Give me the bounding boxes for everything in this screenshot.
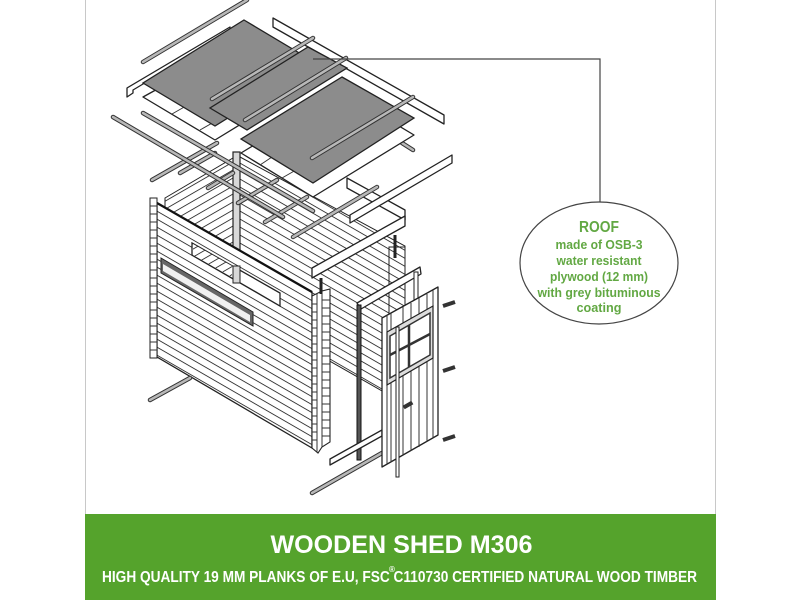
footer banner xyxy=(85,514,716,600)
shed exploded diagram xyxy=(113,0,455,493)
back left wall xyxy=(165,158,233,290)
corner post xyxy=(233,152,240,282)
wall top edge xyxy=(157,203,312,292)
wall window xyxy=(161,258,253,326)
roof panel 3 xyxy=(241,77,414,183)
roof battens xyxy=(143,0,413,158)
page frame xyxy=(86,0,716,514)
door frame xyxy=(357,267,421,460)
registered mark: ® xyxy=(389,565,395,574)
callout: roof: ROOF xyxy=(579,219,619,236)
long rafters xyxy=(113,113,313,217)
front wall xyxy=(157,203,312,448)
callout: roof: with grey bituminous xyxy=(537,285,660,300)
callout: roof: coating xyxy=(576,300,622,315)
ceiling beams xyxy=(152,143,413,222)
door handle xyxy=(403,401,413,409)
door rod xyxy=(396,327,399,477)
bolts xyxy=(443,302,455,440)
left fascia board xyxy=(127,27,230,97)
right log ends xyxy=(312,278,330,453)
roof panel 2 xyxy=(210,47,347,130)
floor boards xyxy=(150,378,382,493)
callout: roof xyxy=(520,202,678,324)
wall opening xyxy=(192,243,280,306)
callout leader line xyxy=(313,59,600,203)
callout: roof: made of OSB-3 xyxy=(556,237,642,252)
left log ends xyxy=(150,198,157,358)
back right wall xyxy=(240,157,405,404)
right wall end post xyxy=(389,235,405,317)
front fascia boards xyxy=(293,155,452,278)
callout: roof: plywood (12 mm) xyxy=(550,269,648,284)
door xyxy=(382,287,438,477)
callout: roof: water resistant xyxy=(556,253,642,268)
subtitle: HIGH QUALITY 19 MM PLANKS OF E.U, FSC C110730 CERTIFIED NATURAL WOOD TIMBER xyxy=(102,569,697,586)
title: WOODEN SHED M306 xyxy=(270,531,532,559)
underlayer panels xyxy=(143,50,414,197)
roof panel 1 xyxy=(143,20,316,126)
right fascia board xyxy=(273,18,444,124)
door window xyxy=(387,306,433,385)
